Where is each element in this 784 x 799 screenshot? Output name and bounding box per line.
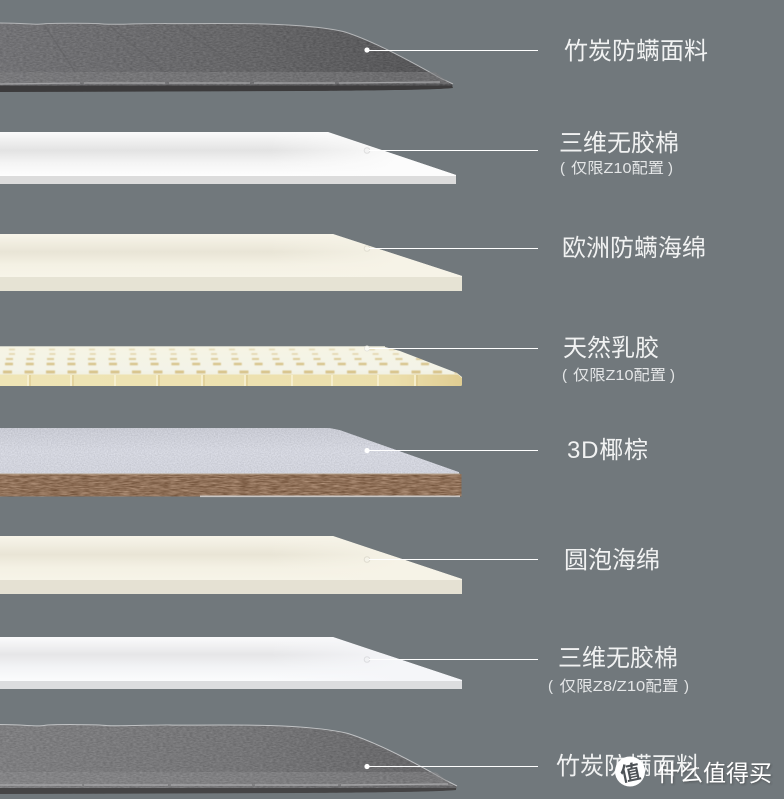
label: natural latex, Z10 only — [562, 335, 675, 384]
label: 3D cotton, Z10 only — [559, 130, 679, 177]
leader line 5 — [367, 450, 538, 452]
label: natural latex, Z10 only: 仅限Z10配置 — [573, 367, 666, 384]
layer 1: charcoal top fabric — [0, 23, 453, 92]
label: natural latex, Z10 only: ) — [670, 367, 675, 384]
leader line 8 — [367, 766, 538, 768]
watermark: 什么值得买 — [657, 760, 772, 786]
label: 3D cotton, Z8/Z10 only: 三维无胶棉 — [558, 645, 678, 672]
layer 4: natural latex — [0, 346, 462, 386]
watermark: 值 — [618, 760, 643, 787]
label: European foam: 欧洲防螨海绵 — [562, 235, 706, 262]
label: bamboo charcoal fabric: 竹炭防螨面料 — [564, 38, 708, 65]
leader line 7 — [369, 658, 538, 660]
label: bamboo charcoal fabric: 竹炭防螨面料 — [556, 753, 700, 780]
layer 7: white 3D cotton — [0, 637, 462, 689]
label: 3D cotton, Z8/Z10 only — [548, 645, 689, 695]
leader line 3 — [369, 248, 538, 250]
layer 6: round-cell foam — [0, 536, 462, 594]
label: 3D cotton, Z10 only: 三维无胶棉 — [559, 130, 679, 157]
label: 3D coconut palm: 3D椰棕 — [567, 437, 648, 464]
leader line 4 — [369, 348, 538, 350]
label: 3D cotton, Z8/Z10 only: ) — [684, 678, 689, 695]
leader line 2 — [369, 150, 538, 152]
label: natural latex, Z10 only: ( — [562, 367, 567, 384]
layer 5: 3D coconut palm — [0, 428, 462, 497]
label: 3D cotton, Z10 only: ( — [560, 160, 565, 177]
layer 8: charcoal bottom fabric — [0, 724, 457, 794]
layer 2: white 3D cotton — [0, 132, 456, 184]
label: round-cell foam: 圆泡海绵 — [564, 547, 660, 574]
label: 3D cotton, Z8/Z10 only: ( — [548, 678, 553, 695]
label: 3D cotton, Z8/Z10 only: 仅限Z8/Z10配置 — [560, 678, 678, 695]
watermark — [615, 756, 772, 787]
leader line 6 — [369, 558, 538, 560]
label: natural latex, Z10 only: 天然乳胶 — [563, 335, 659, 362]
leader line 1 — [367, 50, 538, 52]
layer 3: European foam — [0, 234, 462, 291]
label: 3D cotton, Z10 only: ) — [668, 160, 673, 177]
label: 3D cotton, Z10 only: 仅限Z10配置 — [571, 160, 664, 177]
